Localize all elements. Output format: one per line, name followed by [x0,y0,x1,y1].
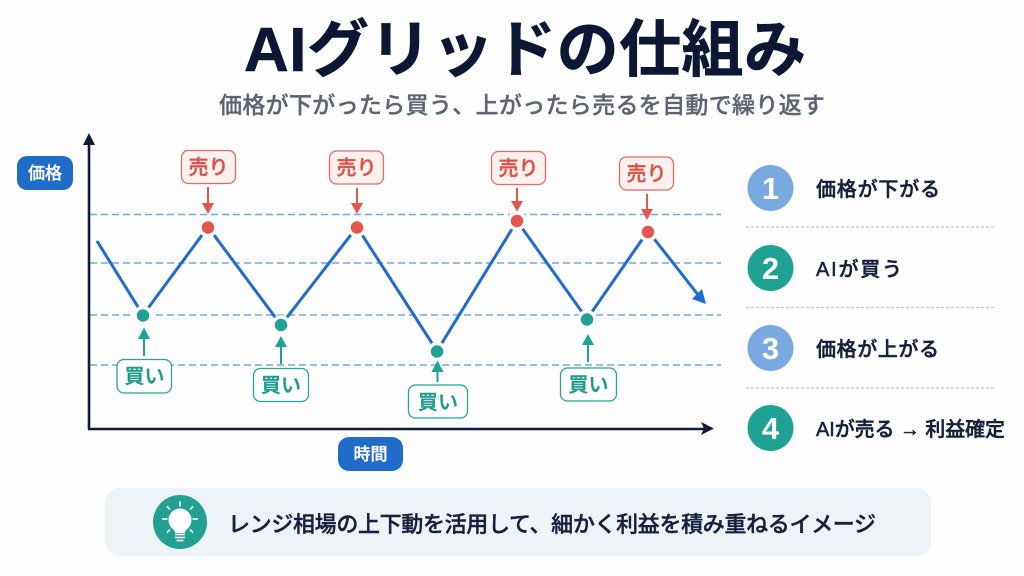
step 1: 1 [762,171,779,206]
buy points [135,308,595,360]
buy label 4: 買い [568,374,608,396]
sell points [200,213,656,240]
buy label 3: 買い [418,392,458,414]
time axis [88,422,714,435]
sell label 3 [492,152,546,212]
step 3: 価格が上がる [816,338,939,361]
step 4: 4 [762,411,780,446]
buy label 2 [254,336,308,402]
sell label 3: 売り [498,157,538,180]
subtitle: 価格が下がったら買う、上がったら売るを自動で繰り返す [219,92,825,118]
buy label 3 [408,360,468,418]
step 1: 価格が下がる [816,178,940,201]
price axis label [17,156,73,190]
price axis [83,133,95,429]
time axis label [338,437,403,471]
step 2: 2 [762,251,779,286]
sell label 4 [620,157,674,220]
buy label 1 [117,328,172,393]
bottom banner [105,488,931,556]
buy label 1: 買い [124,366,164,388]
chart: price grid trading [83,133,721,435]
sell label 2 [330,151,384,214]
step 2: AIが買う [816,258,902,281]
step 3: 3 [762,331,779,366]
price axis label: 価格 [28,164,62,183]
icon: light bulb [153,495,207,549]
sell label 1 [182,150,236,214]
steps panel [746,165,1005,451]
step 4 [748,405,1005,451]
buy label 4 [560,334,616,401]
banner text: レンジ相場の上下動を活用して、細かく利益を積み重ねるイメージ [228,512,876,537]
price line [97,221,706,351]
step 2 [748,245,902,291]
time axis label: 時間 [354,445,388,464]
sell label 4: 売り [626,162,666,186]
step 1 [748,165,940,211]
step 4: AIが売る → 利益確定 [816,418,1005,441]
sell label 2: 売り [336,156,376,180]
buy label 2: 買い [261,375,301,397]
step 3 [748,325,939,371]
sell label 1: 売り [188,156,228,179]
title: AIグリッドの仕組み [244,16,806,85]
